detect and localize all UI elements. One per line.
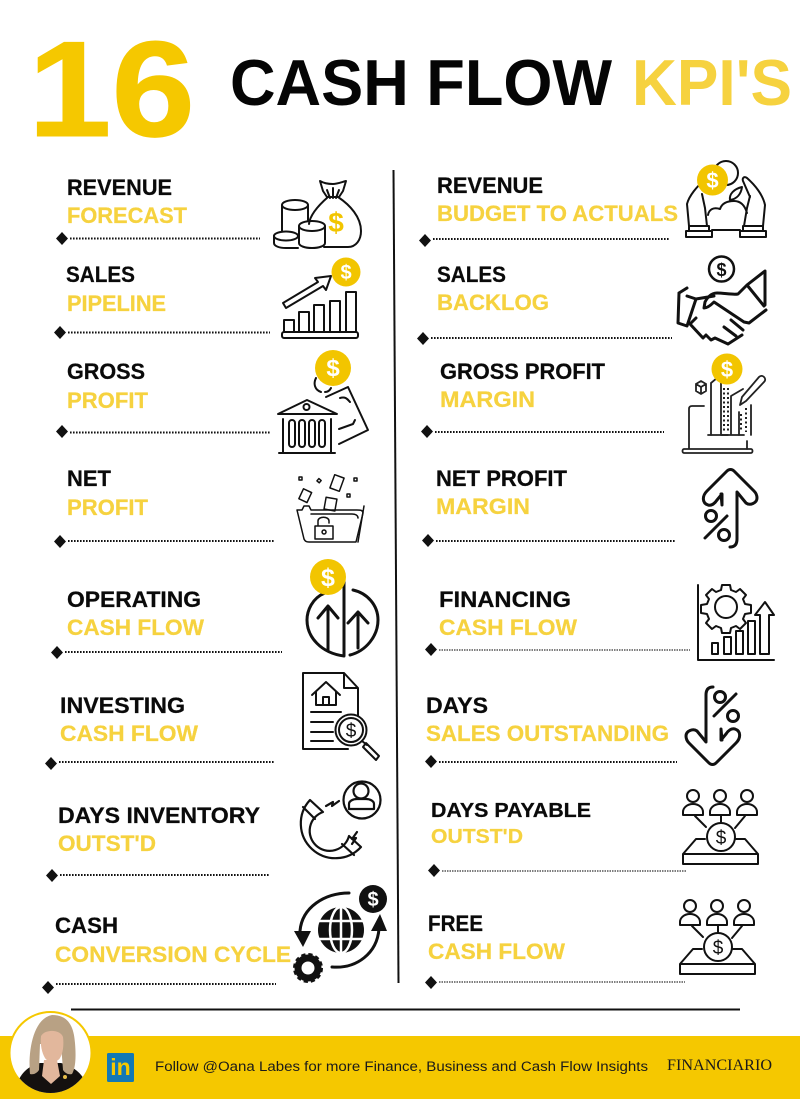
KPI: revenue budget to actuals: REVENUE [437,173,543,198]
KPI: days sales outstanding [425,693,677,768]
KPI: days inventory outstanding [46,803,269,882]
icon: money bag and coins [274,181,361,248]
KPI: free cash flow [425,911,685,989]
portrait [10,1012,92,1098]
KPI: revenue forecast [56,175,260,245]
KPI: gross profit margin [421,359,664,438]
brand: Financiario: FINANCIARIO [667,1057,772,1074]
KPI: cash conversion cycle [42,913,291,994]
icon: hands holding plant and coin [686,161,766,237]
KPI: days payable outstanding [428,800,687,877]
KPI: net profit [54,466,275,548]
title: big number 16: 16 [28,13,195,165]
KPI: operating cash flow [51,587,282,659]
icon: hands holding plant and coin: $ [706,168,719,193]
KPI: days payable outstanding: DAYS PAYABLE [431,800,591,822]
KPI: gross profit: PROFIT [67,388,149,413]
KPI: net profit: PROFIT [67,495,149,520]
KPI: net profit: NET [67,466,112,491]
icon: people and dollar platform 2 [680,900,755,974]
KPI: financing cash flow [425,587,690,656]
icon: people and dollar platform [683,790,758,864]
KPI: days sales outstanding: DAYS [426,693,488,718]
icon: magnet and person [301,782,380,858]
footer text: Follow @Oana Labes for more Finance, Business and Cash Flow Insights [155,1059,648,1074]
icon: bank with banknote [278,350,368,453]
icon: folder with lock [297,475,364,542]
KPI: gross profit [56,359,270,438]
KPI: operating cash flow: CASH FLOW [67,615,204,640]
icon: circular up arrows [307,559,378,656]
KPI: revenue forecast: FORECAST [67,203,188,228]
KPI: financing cash flow: FINANCING [439,587,571,612]
icon: dollar on platform 2: $ [713,938,724,959]
icon: buildings and laptop [682,354,765,453]
KPI: revenue budget to actuals [419,173,678,247]
KPI: investing cash flow: CASH FLOW [60,721,198,746]
KPI: revenue forecast: REVENUE [67,175,172,200]
KPI: days inventory outstanding: DAYS INVENTORY [58,803,260,828]
KPI: sales backlog: SALES [437,262,506,287]
icon: buildings and laptop: $ [721,357,733,382]
KPI: cash conversion cycle: CASH [55,913,118,938]
center divider [394,170,398,983]
KPI: sales pipeline [54,262,270,339]
KPI: gross profit margin: MARGIN [440,387,535,412]
icon: document with house and magnifier [303,673,379,760]
KPI: days sales outstanding: SALES OUTSTANDING [426,721,669,746]
icon: globe cycle [294,885,387,981]
icon: handshake with coin [678,256,766,344]
KPI: free cash flow: FREE [428,911,483,936]
KPI: days inventory outstanding: OUTST'D [58,831,156,856]
KPI: operating cash flow: OPERATING [67,587,201,612]
icon: circular up arrows: $ [321,564,335,592]
icon: bank with banknote: $ [326,355,340,382]
KPI: free cash flow: CASH FLOW [428,939,565,964]
icon: linkedin [107,1053,134,1082]
icon: dollar on bag: $ [328,207,344,238]
KPI: sales backlog [417,262,672,345]
KPI: investing cash flow: INVESTING [60,693,185,718]
KPI: sales backlog: BACKLOG [437,290,549,315]
KPI: gross profit: GROSS [67,359,145,384]
icon: gear and bars chart [698,585,774,660]
icon: down arrow percent [686,687,740,764]
icon: up arrow percent [703,470,757,547]
KPI: revenue budget to actuals: BUDGET TO ACTUALS [437,201,678,226]
icon: dollar on handshake coin: $ [716,260,727,280]
KPI: net profit margin [422,466,676,547]
icon: globe cycle: $ [367,889,379,911]
icon: growth bars [282,258,360,338]
KPI: net profit margin: NET PROFIT [436,466,568,491]
KPI: cash conversion cycle: CONVERSION CYCLE [55,942,291,967]
KPI: investing cash flow [45,693,274,770]
footer band [0,1036,800,1099]
KPI: net profit margin: MARGIN [436,494,530,519]
KPI: sales pipeline: PIPELINE [67,291,166,316]
icon: dollar in magnifier: $ [346,721,357,742]
icon: linkedin: in [110,1054,131,1080]
KPI: gross profit margin: GROSS PROFIT [440,359,606,384]
KPI: financing cash flow: CASH FLOW [439,615,577,640]
title: KPI's: KPI'S [632,46,792,119]
bottom rule [71,1008,740,1010]
icon: dollar on platform: $ [716,828,727,849]
icon: growth bars: $ [340,262,352,284]
title: cash flow: CASH FLOW [230,46,613,119]
KPI: sales pipeline: SALES [66,262,135,287]
KPI: days payable outstanding: OUTST'D [431,826,523,848]
